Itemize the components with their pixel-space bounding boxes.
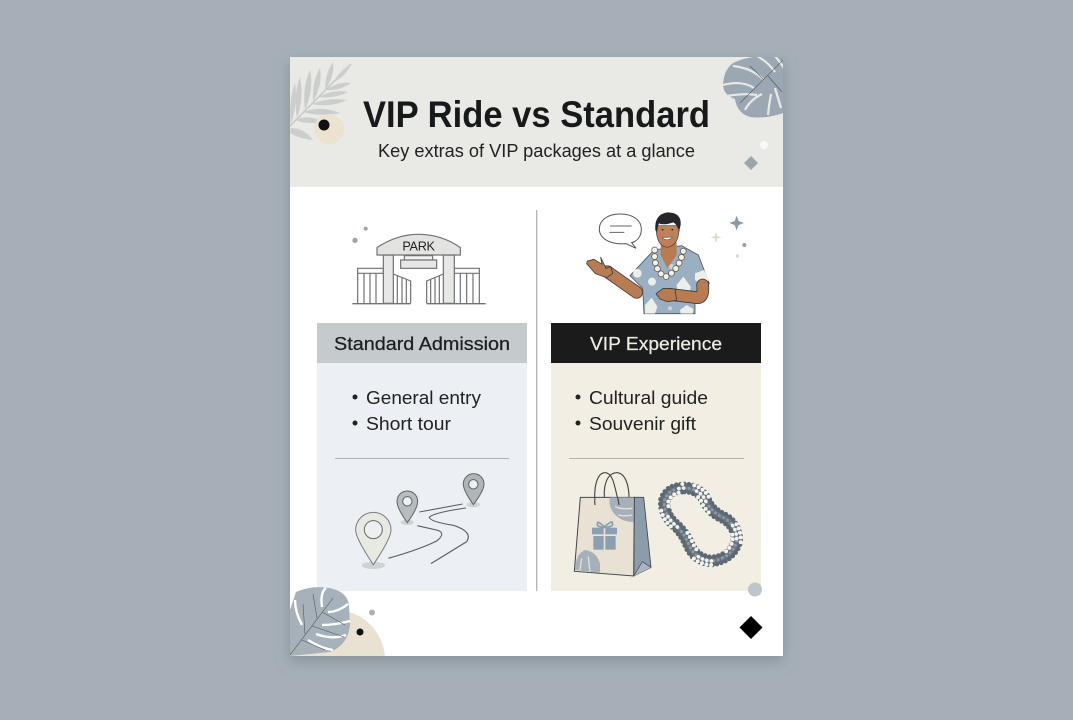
header band [290,57,783,187]
bag front [574,497,634,576]
grey dot [748,582,762,596]
arch [377,234,460,255]
shirt flowers [633,264,709,314]
monstera leaf bottom left [290,587,350,656]
black dot [356,628,364,636]
neck [661,242,677,268]
sign [404,256,433,260]
fences [358,268,479,303]
bullet list: Souvenir gift [589,413,696,434]
center divider [536,210,537,591]
grey diamond [744,156,758,170]
near arm [669,285,703,298]
black diamond [740,616,762,639]
hand [587,257,613,278]
panel header [551,323,761,363]
road [388,504,468,564]
card background [290,57,783,656]
bullet list: General entry [366,387,482,408]
lei [655,250,684,277]
pin shadows [362,502,480,569]
large pin [356,512,391,565]
icon: flower lei [660,484,741,565]
beige semicircle [291,612,385,656]
middle pin [397,491,418,523]
title: VIP Ride vs Standard [363,94,710,135]
icon: park gate [352,227,486,304]
panel heading: Standard Admission [334,333,510,354]
white dot [760,141,768,149]
smile [662,237,673,240]
hair [655,212,681,232]
dots [352,227,368,243]
panel: VIP experience [551,323,761,591]
far arm [607,272,637,292]
icon: guide with speech bubble [587,212,746,314]
far pin [463,474,484,505]
gift icon [592,522,617,550]
footer decorations [290,587,385,656]
bullet list: Cultural guide [589,387,708,408]
infographic canvas [286,57,787,665]
speech bubble [599,214,641,248]
icon: palm leaf [290,62,351,140]
bag leaves [609,497,634,522]
head [656,226,679,247]
black dot [318,120,330,130]
near hand [656,288,677,302]
bullet list [352,387,482,434]
icon: gift bag [574,473,651,576]
panel heading: VIP Experience [590,333,722,354]
small grey dot [369,610,375,616]
ground [352,302,486,306]
panel body [317,363,527,591]
label: PARK: PARK [402,240,436,254]
beige circle [314,114,344,144]
header decorations [290,55,786,144]
panel: standard admission [317,323,527,591]
bullet list [576,387,708,434]
panel header [317,323,527,363]
pillars [383,255,393,303]
subtitle: Key extras of VIP packages at a glance [378,140,695,161]
shirt [630,246,709,314]
bag handles [595,473,629,505]
panel body [551,363,761,591]
bullet list: Short tour [366,413,451,434]
icon: monstera leaf top right [723,55,786,117]
icon: map pins and road [356,474,484,569]
bag side [634,497,651,576]
sparkles [729,216,744,230]
